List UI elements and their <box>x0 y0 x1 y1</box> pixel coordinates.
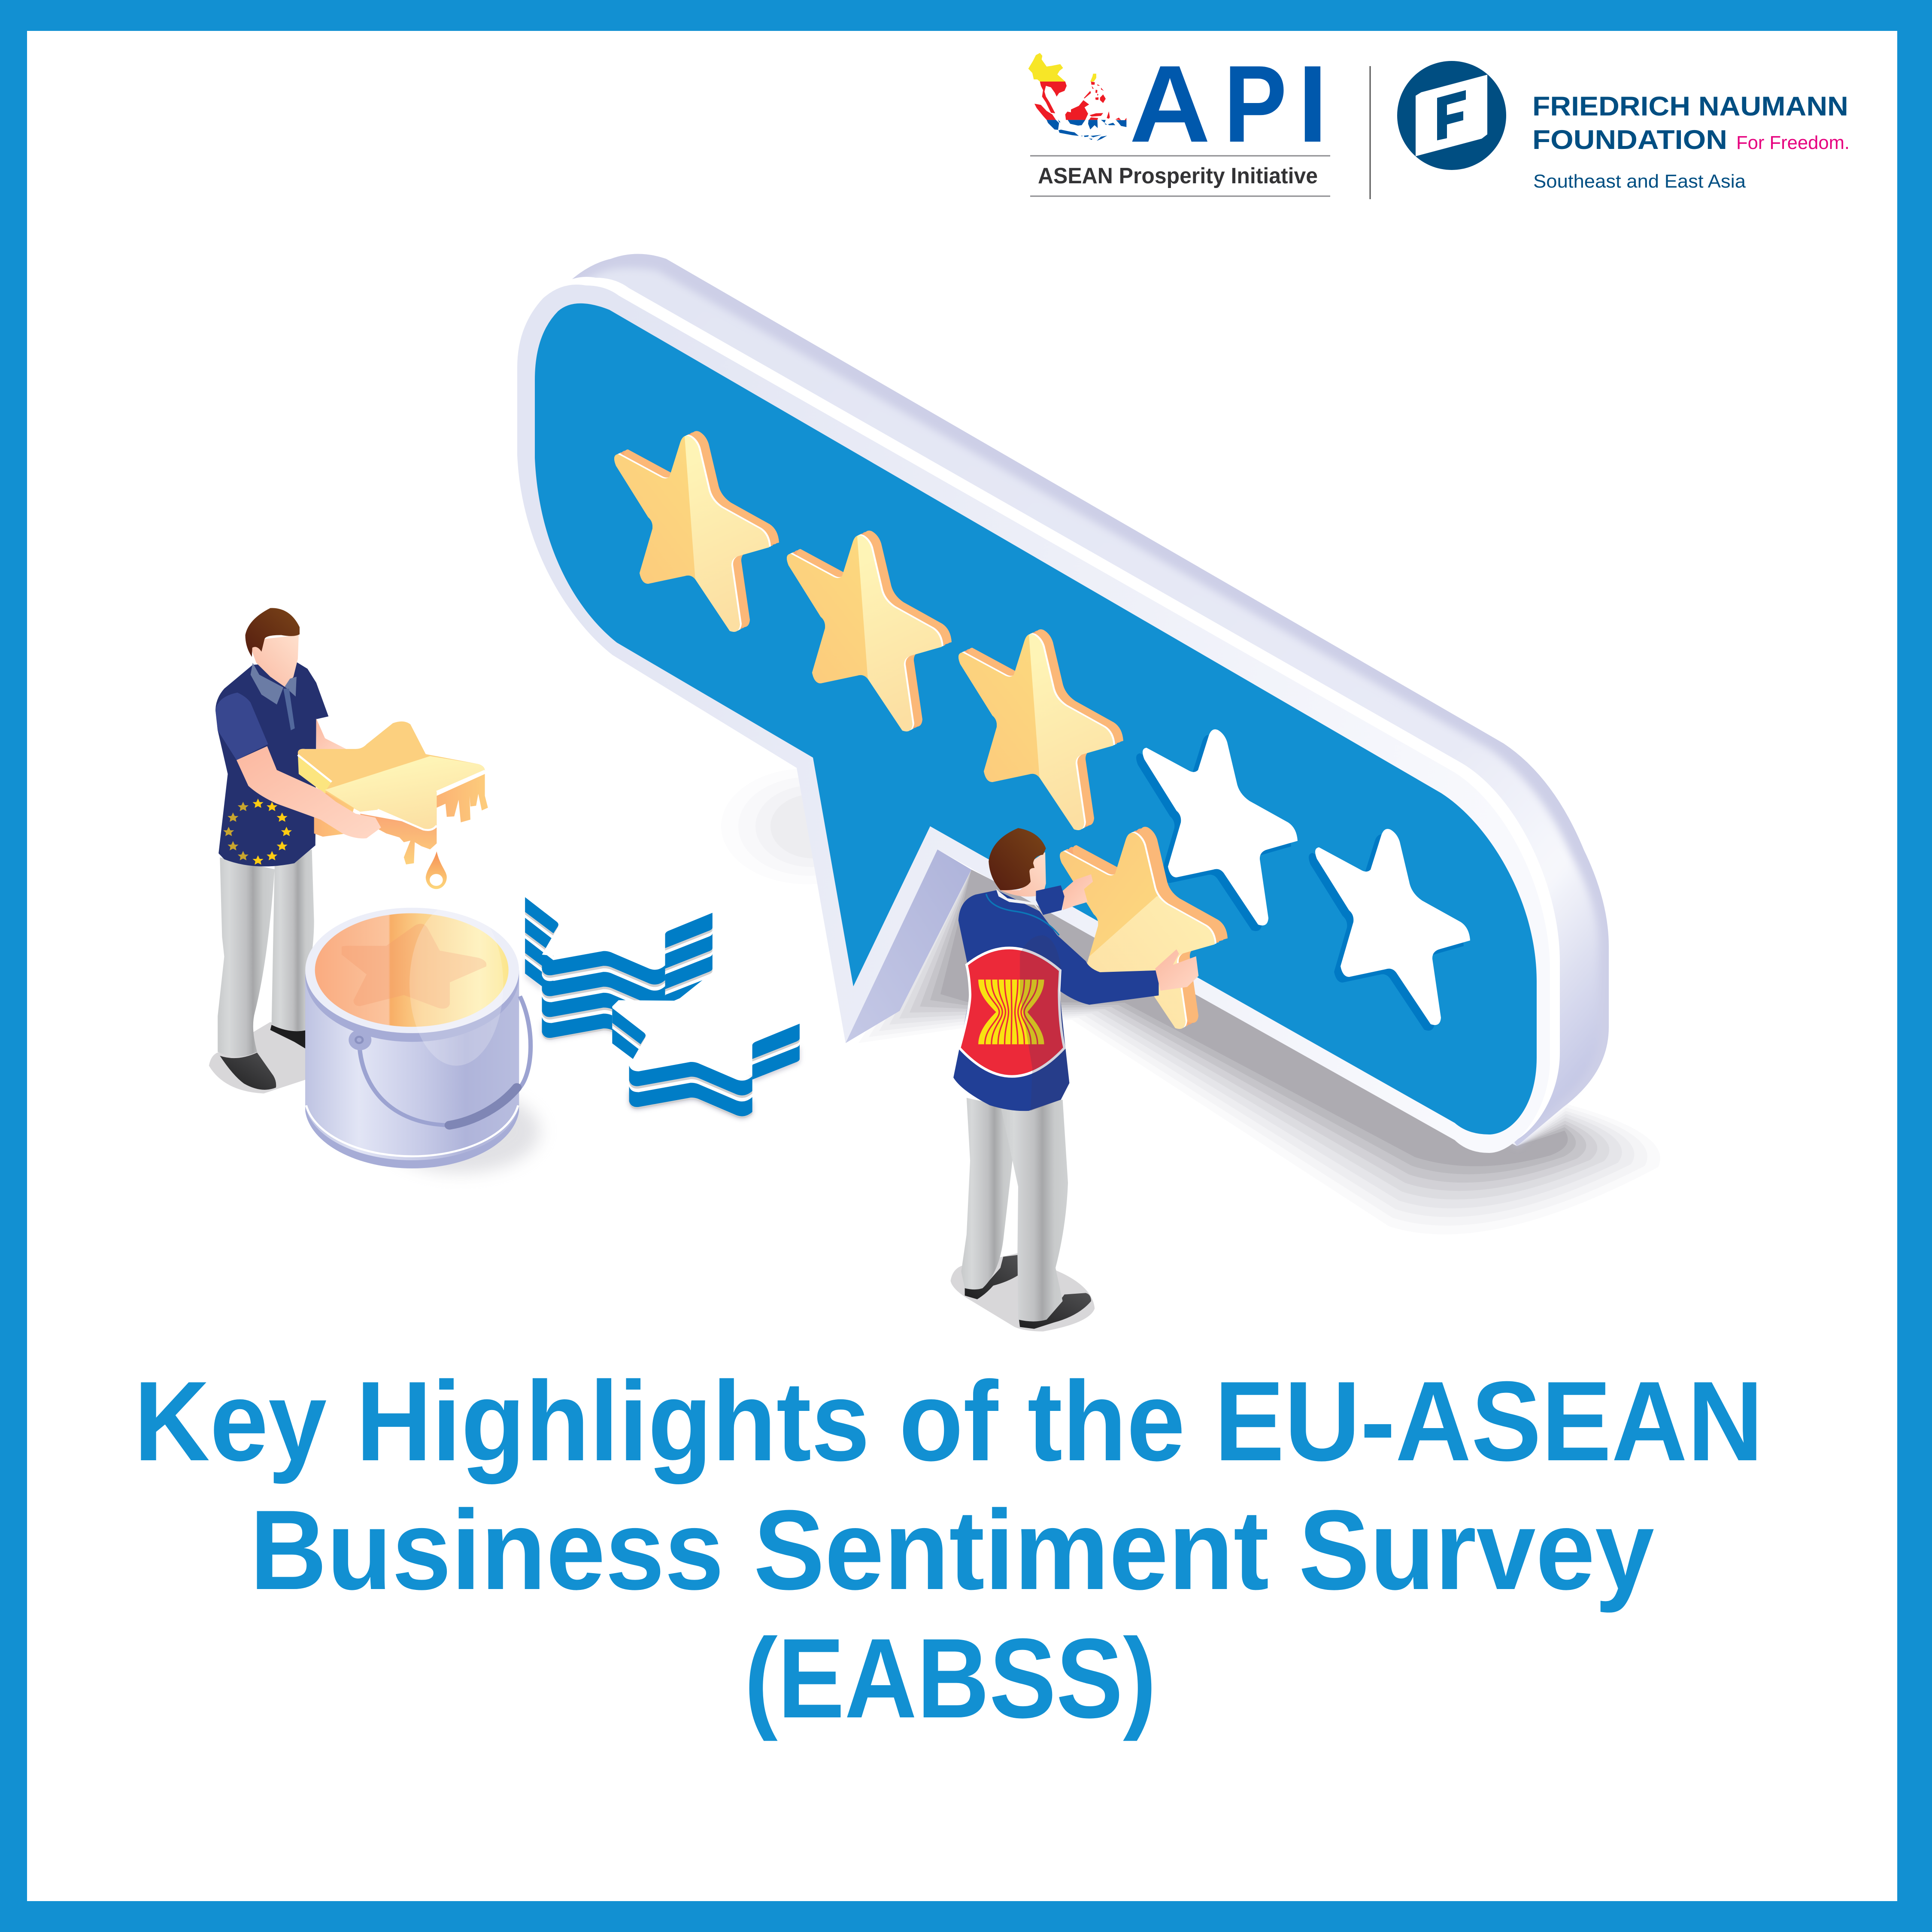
back arm <box>316 719 347 750</box>
title <box>134 1358 1763 1742</box>
jacket collar piping <box>986 894 1059 935</box>
star top face <box>298 722 485 830</box>
paint surface <box>315 913 509 1027</box>
man with EU shirt pouring star <box>209 608 488 1093</box>
star 5 empty <box>1309 829 1470 1031</box>
logo letters API: I <box>1298 43 1328 165</box>
neck and face <box>1001 852 1046 897</box>
red ASEAN circle <box>959 948 1065 1077</box>
hair <box>245 608 300 657</box>
man in ASEAN jacket placing star <box>950 828 1198 1331</box>
region label: Southeast and East Asia <box>1533 171 1746 192</box>
speech bubble with star rating <box>517 254 1609 1153</box>
ground shadow <box>209 1022 312 1093</box>
legs <box>218 849 314 1057</box>
title line 3: (EABSS) <box>744 1615 1156 1742</box>
paint drop <box>426 851 447 889</box>
front star stack <box>612 973 800 1119</box>
near hand <box>1155 949 1198 991</box>
bubble blue face <box>535 303 1537 1134</box>
ground shadow <box>950 1253 1095 1331</box>
bubble back side <box>567 254 1609 1146</box>
star 1 gold <box>614 431 779 632</box>
shirt <box>215 662 328 867</box>
legs <box>961 1098 1068 1322</box>
star being dipped, side drips <box>314 778 356 837</box>
bubble tail notch side <box>846 849 971 1043</box>
logo letters API: P <box>1224 43 1287 165</box>
icon: ASEAN map <box>1028 53 1126 141</box>
shoes <box>220 1025 307 1090</box>
title line 2: Business Sentiment Survey <box>250 1486 1655 1614</box>
title line 1: Key Highlights of the EU-ASEAN <box>134 1358 1763 1485</box>
bubble white edge highlight <box>527 277 1560 1145</box>
arm holding star <box>237 746 381 838</box>
logo subtitle: ASEAN Prosperity Initiative <box>1038 164 1318 188</box>
tagline: For Freedom. <box>1736 132 1850 153</box>
shadow behind bubble tail <box>721 768 893 884</box>
bucket body <box>305 971 519 1160</box>
EU star circle on shirt <box>223 798 292 864</box>
foundation name line 2: FOUNDATION <box>1532 125 1727 155</box>
logo: ASEAN Prosperity Initiative <box>1028 43 1330 196</box>
star drips right <box>437 774 488 822</box>
shirt collar <box>996 889 1043 915</box>
ASEAN rice stalks emblem <box>978 980 1044 1044</box>
ground shadow of bubble <box>858 870 1660 1234</box>
icon: FNF circle <box>1397 61 1506 170</box>
shoes <box>965 1255 1091 1329</box>
paint bucket <box>305 903 540 1173</box>
bucket handle <box>349 996 531 1125</box>
star 2 gold <box>787 531 952 731</box>
logo: Friedrich Naumann Foundation <box>1397 61 1850 192</box>
star reflection in paint <box>342 924 486 1009</box>
bucket rim <box>305 911 519 1042</box>
foundation name line 1: FRIEDRICH NAUMANN <box>1532 91 1848 121</box>
bucket bottom band <box>305 971 519 1168</box>
logo letters API <box>1129 43 1328 165</box>
star 3 gold <box>958 629 1123 830</box>
jacket <box>953 890 1159 1111</box>
far sleeve cuff <box>1036 886 1065 915</box>
star 4 empty <box>1136 729 1298 931</box>
bubble front rim <box>517 285 1550 1153</box>
collar and placket <box>251 663 297 730</box>
logo letters API: A <box>1129 43 1210 165</box>
star drips front <box>360 814 437 864</box>
far hand <box>1063 874 1093 910</box>
stacks of blank stars <box>525 896 800 1119</box>
bucket shadow <box>382 1089 540 1173</box>
highlight on bucket <box>409 903 503 1066</box>
head and neck <box>251 635 299 688</box>
hair <box>989 828 1046 890</box>
shirt sleeve <box>215 693 268 760</box>
jacket shading <box>1020 935 1069 1111</box>
back star stack <box>525 896 713 1049</box>
star held by man <box>1060 827 1228 1029</box>
